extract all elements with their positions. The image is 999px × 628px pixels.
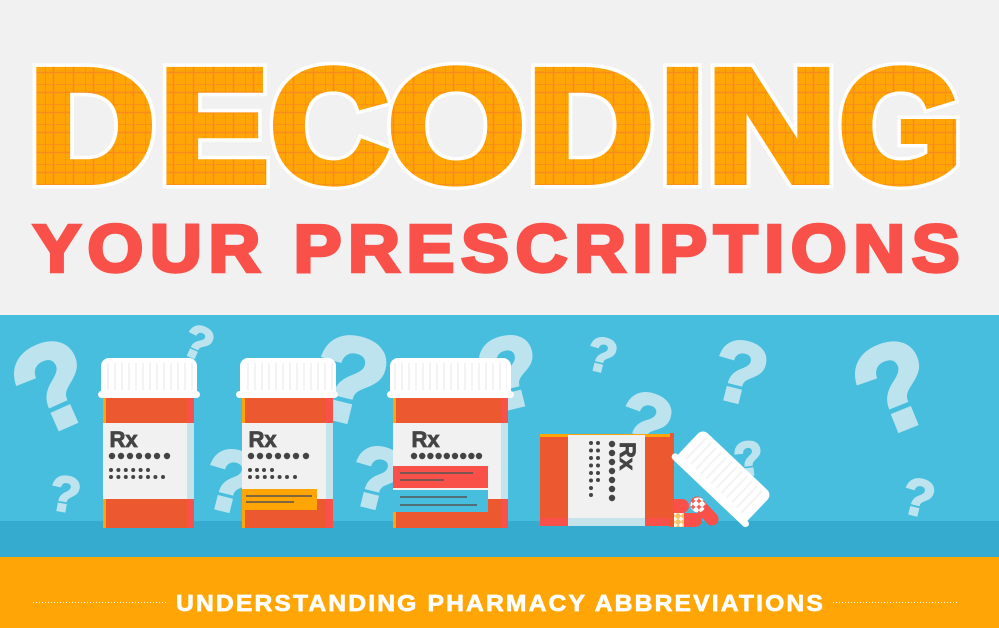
subtitle: YOUR PRESCRIPTIONS: YOUR PRESCRIPTIONS [33,211,960,286]
title: DECODING: I [660,36,705,215]
title: DECODING: D [528,36,654,215]
bottle 1 [98,358,200,528]
tipped bottle [540,433,674,527]
bottle 2: Rx [248,427,277,452]
question marks: ? [834,310,954,464]
question marks: ? [581,327,622,385]
title: DECODING: D [528,36,654,215]
bottle 3 [387,358,514,528]
title: DECODING: O [388,36,525,215]
bottle 3: Rx [412,427,440,452]
title: DECODING: I [660,36,705,215]
question marks [0,306,954,535]
footer heading: UNDERSTANDING PHARMACY ABBREVIATIONS [176,591,823,617]
title: DECODING: O [388,36,525,215]
title: DECODING: C [270,36,388,215]
title: DECODING: N [707,36,837,215]
title: DECODING: C [270,36,388,215]
question marks: ? [298,306,402,454]
blue scene background [0,315,999,557]
title: DECODING [29,36,962,215]
title: DECODING: D [29,36,155,215]
bottle 2 [236,358,338,528]
question marks: ? [703,320,777,426]
bottle 1: Rx [110,427,138,452]
title: DECODING: E [160,36,269,215]
title: DECODING: G [839,36,962,215]
question marks: ? [731,431,767,488]
question marks: ? [896,467,941,530]
question marks: ? [467,311,553,435]
footer dotted rules [33,602,958,604]
title: DECODING: G [839,36,962,215]
title: DECODING: E [160,36,269,215]
question marks: ? [175,313,222,372]
spilled pills [674,498,712,527]
question marks: ? [194,429,268,535]
tipped bottle: Rx [615,442,640,471]
bottle cap on its side [670,426,775,529]
question marks: ? [340,426,414,532]
question marks: ? [606,371,684,476]
floor band [0,521,999,557]
title: DECODING: D [29,36,155,215]
title: DECODING: N [707,36,837,215]
question marks: ? [45,464,85,524]
footer band [0,557,999,628]
